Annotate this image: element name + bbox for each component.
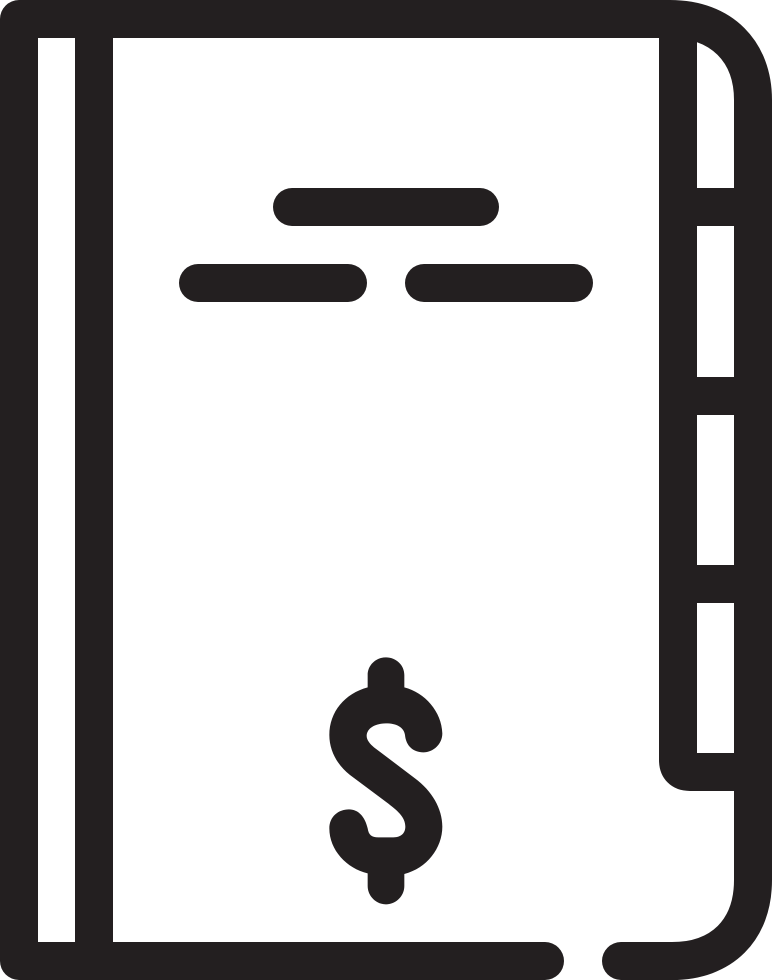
icon: dollar sign (329, 657, 442, 904)
title line lower left (198, 264, 348, 302)
tab divider 3 (678, 565, 753, 603)
tab divider edge (678, 19, 753, 772)
index tab column (678, 19, 753, 772)
spine line (75, 19, 113, 961)
title lines (198, 207, 574, 283)
tab divider 2 (678, 377, 753, 415)
tab divider 1 (678, 188, 753, 226)
title line lower right (424, 264, 574, 302)
title line top (292, 188, 480, 226)
